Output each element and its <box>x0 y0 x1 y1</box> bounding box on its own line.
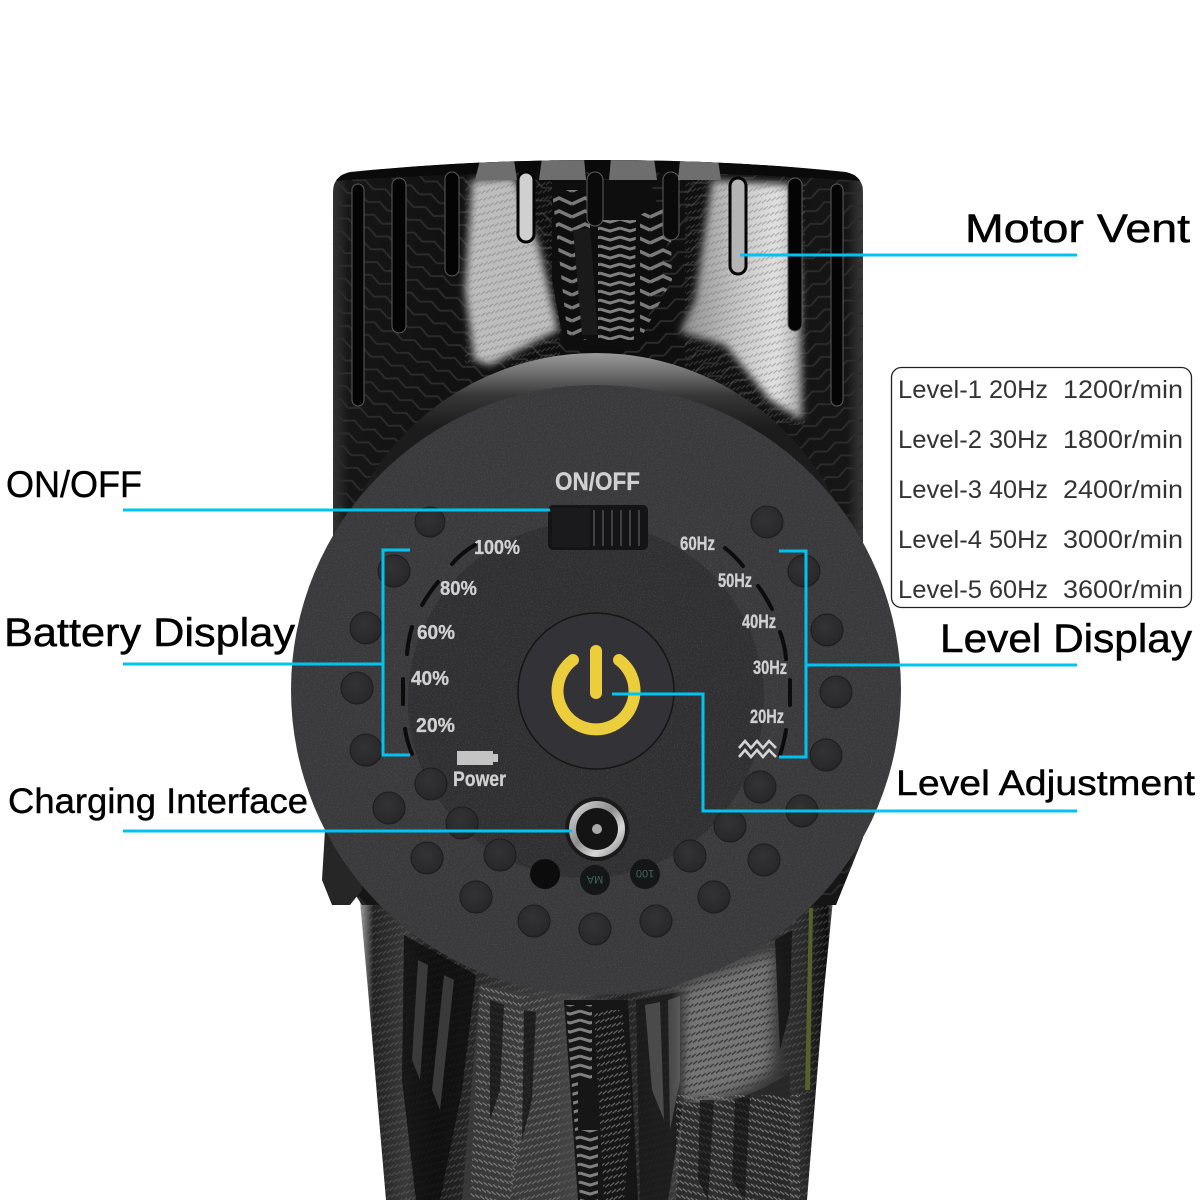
printed panel labels: Power <box>453 768 506 791</box>
right highlight patch <box>680 180 802 420</box>
label: Charging Interface: Charging Interface <box>8 782 308 821</box>
row: level 1 <box>898 376 1183 404</box>
top vent tabs <box>475 158 721 180</box>
printed panel labels: 30Hz <box>753 658 787 679</box>
printed panel labels: 80% <box>440 578 477 600</box>
top rim band <box>333 158 863 181</box>
label: Level Display: Level Display <box>940 617 1192 661</box>
row: level 3: Level-3 <box>898 476 982 504</box>
printed panel labels: 40Hz <box>742 612 776 633</box>
printed panel labels: 50Hz <box>718 571 752 592</box>
printed panel labels <box>411 468 787 791</box>
printed panel labels: ON/OFF <box>555 468 640 496</box>
printed panel labels: 60Hz <box>680 534 715 555</box>
bracket: battery display <box>123 550 410 755</box>
printed panel labels: 20Hz <box>750 707 784 728</box>
icon: vibration wave <box>739 741 776 757</box>
bracket: level display <box>779 551 1077 757</box>
rear trigger bump <box>322 830 362 905</box>
printed panel labels: 100% <box>474 537 520 559</box>
vent slots <box>352 172 843 406</box>
row: level 2 <box>898 426 1183 454</box>
indicator lights: 100 <box>636 867 654 879</box>
product: massage gun photo <box>291 158 901 1200</box>
indicator lights <box>530 859 660 895</box>
power button <box>518 613 674 769</box>
collar above the disc <box>363 353 830 494</box>
row: level 3 <box>898 476 1183 504</box>
row: level 4: 50Hz <box>989 526 1048 554</box>
icon: power symbol <box>558 651 635 729</box>
button dimples <box>341 506 852 945</box>
label: Motor Vent: Motor Vent <box>965 207 1190 251</box>
level scale arc <box>725 548 790 755</box>
row: level 3: 40Hz <box>989 476 1048 504</box>
handle body <box>359 890 837 1200</box>
control disc <box>291 385 901 995</box>
label: Battery Display: Battery Display <box>4 611 295 655</box>
center chevron weave <box>552 180 668 350</box>
icon: battery <box>457 751 498 765</box>
battery scale arc <box>403 545 475 754</box>
indicator lights: MA <box>586 873 603 885</box>
panel: level specification table <box>892 368 1192 608</box>
ON/OFF switch <box>548 505 648 550</box>
label: Level Adjustment: Level Adjustment <box>896 764 1195 803</box>
leader: on/off <box>123 508 550 512</box>
left highlight patch <box>465 178 558 365</box>
motor housing <box>329 158 863 905</box>
row: level 5: Level-5 <box>898 576 982 604</box>
printed panel labels: 60% <box>417 622 455 644</box>
row: level 5: 60Hz <box>989 576 1048 604</box>
label: ON/OFF: ON/OFF <box>6 464 142 505</box>
row: level 4 <box>898 526 1183 554</box>
row: level 1: 20Hz <box>989 376 1048 404</box>
callout lines <box>123 255 1077 831</box>
row: level 4: Level-4 <box>898 526 982 554</box>
row: level 1: 1200r/min <box>1063 376 1183 404</box>
charging port <box>565 797 629 861</box>
row: level 5: 3600r/min <box>1063 576 1183 604</box>
leader: motor vent <box>740 254 1077 256</box>
leader: level adjustment <box>612 694 1077 811</box>
inner recessed area <box>408 522 764 878</box>
row: level 3: 2400r/min <box>1063 476 1183 504</box>
leader: charging interface <box>123 830 572 832</box>
printed panel labels: 20% <box>416 715 455 737</box>
row: level 1: Level-1 <box>898 376 982 404</box>
row: level 5 <box>898 576 1183 604</box>
printed panel labels: 40% <box>411 668 449 690</box>
row: level 4: 3000r/min <box>1063 526 1183 554</box>
row: level 2: 30Hz <box>989 426 1048 454</box>
row: level 2: 1800r/min <box>1063 426 1183 454</box>
row: level 2: Level-2 <box>898 426 982 454</box>
